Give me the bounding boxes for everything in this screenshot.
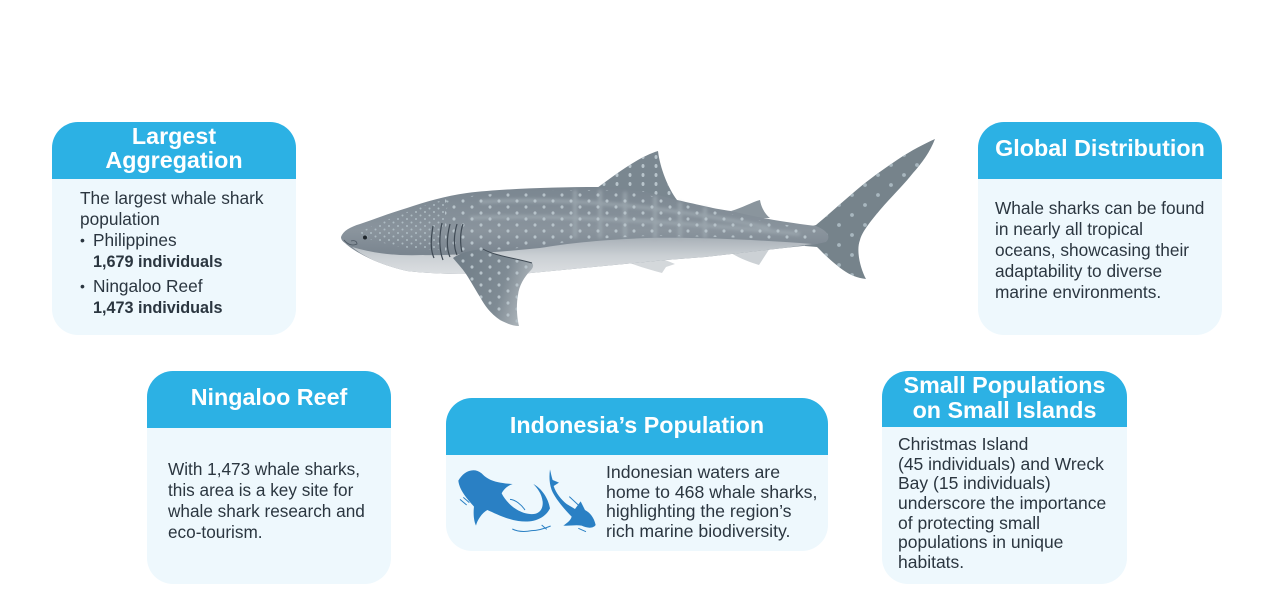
shark pectoral fin — [453, 249, 533, 326]
heading: small populations on small islands — [882, 371, 1127, 427]
text: small populations body: underscore the importance — [898, 493, 1106, 513]
text: small populations body — [898, 434, 1106, 572]
text: ningaloo reef body: With 1,473 whale sharks, — [168, 459, 360, 479]
text: indonesia's population body: Indonesian waters are — [606, 462, 780, 482]
shark dorsal fins — [597, 151, 770, 218]
shark belly — [352, 238, 812, 275]
heading: largest aggregation: Aggregation — [105, 147, 243, 173]
text: ningaloo reef body: whale shark research and — [168, 501, 365, 521]
heading: ningaloo reef — [147, 371, 391, 428]
text: largest aggregation body: population — [80, 209, 160, 229]
text: indonesia's population body: home to 468 whale sharks, — [606, 482, 817, 502]
text: small populations body: populations in unique — [898, 532, 1063, 552]
text: small populations body: of protecting small — [898, 513, 1040, 533]
text: global distribution body: adaptability to diverse — [995, 261, 1162, 281]
heading: indonesia's population — [446, 398, 828, 455]
panel: ningaloo reef — [147, 371, 391, 584]
text: indonesia's population body: rich marine biodiversity. — [606, 521, 790, 541]
shark eye — [363, 236, 367, 240]
text: largest aggregation body: • — [80, 278, 85, 294]
text: largest aggregation body: 1,473 individuals — [93, 299, 223, 317]
panel: global distribution — [978, 122, 1222, 335]
text: ningaloo reef body: this area is a key site for — [168, 480, 353, 500]
text: ningaloo reef body: eco-tourism. — [168, 522, 263, 542]
shark mouth — [344, 240, 357, 245]
heading: global distribution — [978, 122, 1222, 179]
heading: largest aggregation — [52, 122, 296, 179]
shark tail fin — [805, 139, 935, 279]
text: largest aggregation body: Philippines — [93, 230, 177, 250]
text: indonesia's population body — [606, 462, 817, 541]
shark body spots — [445, 190, 816, 252]
shark lower fins — [630, 248, 770, 273]
icon: right shark — [549, 469, 596, 528]
text: small populations body: Christmas Island — [898, 434, 1028, 454]
shark light stripes — [470, 190, 800, 238]
text: largest aggregation body: The largest whale shark — [80, 188, 263, 208]
text: largest aggregation body: • — [80, 232, 85, 248]
heading: global distribution: Global Distribution — [995, 135, 1205, 161]
text: largest aggregation body: Ningaloo Reef — [93, 276, 203, 296]
text: small populations body: habitats. — [898, 552, 964, 572]
text: indonesia's population body: highlighting the region’s — [606, 501, 792, 521]
heading: indonesia's population: Indonesia’s Population — [510, 412, 764, 438]
text: ningaloo reef body — [168, 459, 365, 542]
panel: small populations on small islands — [882, 371, 1127, 584]
panel: largest aggregation — [52, 122, 296, 335]
text: global distribution body: in nearly all tropical — [995, 219, 1143, 239]
text: global distribution body: Whale sharks can be found — [995, 198, 1204, 218]
text: global distribution body — [995, 198, 1204, 302]
heading: largest aggregation: Largest — [132, 123, 216, 149]
heading: small populations on small islands: Small Populations — [904, 372, 1105, 398]
shark head spots — [360, 198, 450, 250]
shark gills — [431, 223, 463, 260]
text: largest aggregation body: 1,679 individuals — [93, 253, 223, 271]
text: global distribution body: marine environments. — [995, 282, 1161, 302]
shark body — [341, 187, 828, 275]
heading: small populations on small islands: on Small Islands — [913, 397, 1096, 423]
text: global distribution body: oceans, showcasing their — [995, 240, 1189, 260]
icon: left shark — [458, 470, 550, 526]
text: small populations body: (45 individuals) and Wreck — [898, 454, 1104, 474]
icon: two whale sharks — [458, 470, 596, 532]
icon: water ripples — [460, 497, 586, 532]
heading: ningaloo reef: Ningaloo Reef — [191, 384, 347, 410]
panel: indonesia's population — [446, 398, 828, 551]
text: small populations body: Bay (15 individuals) — [898, 473, 1051, 493]
text: largest aggregation body — [80, 188, 264, 317]
